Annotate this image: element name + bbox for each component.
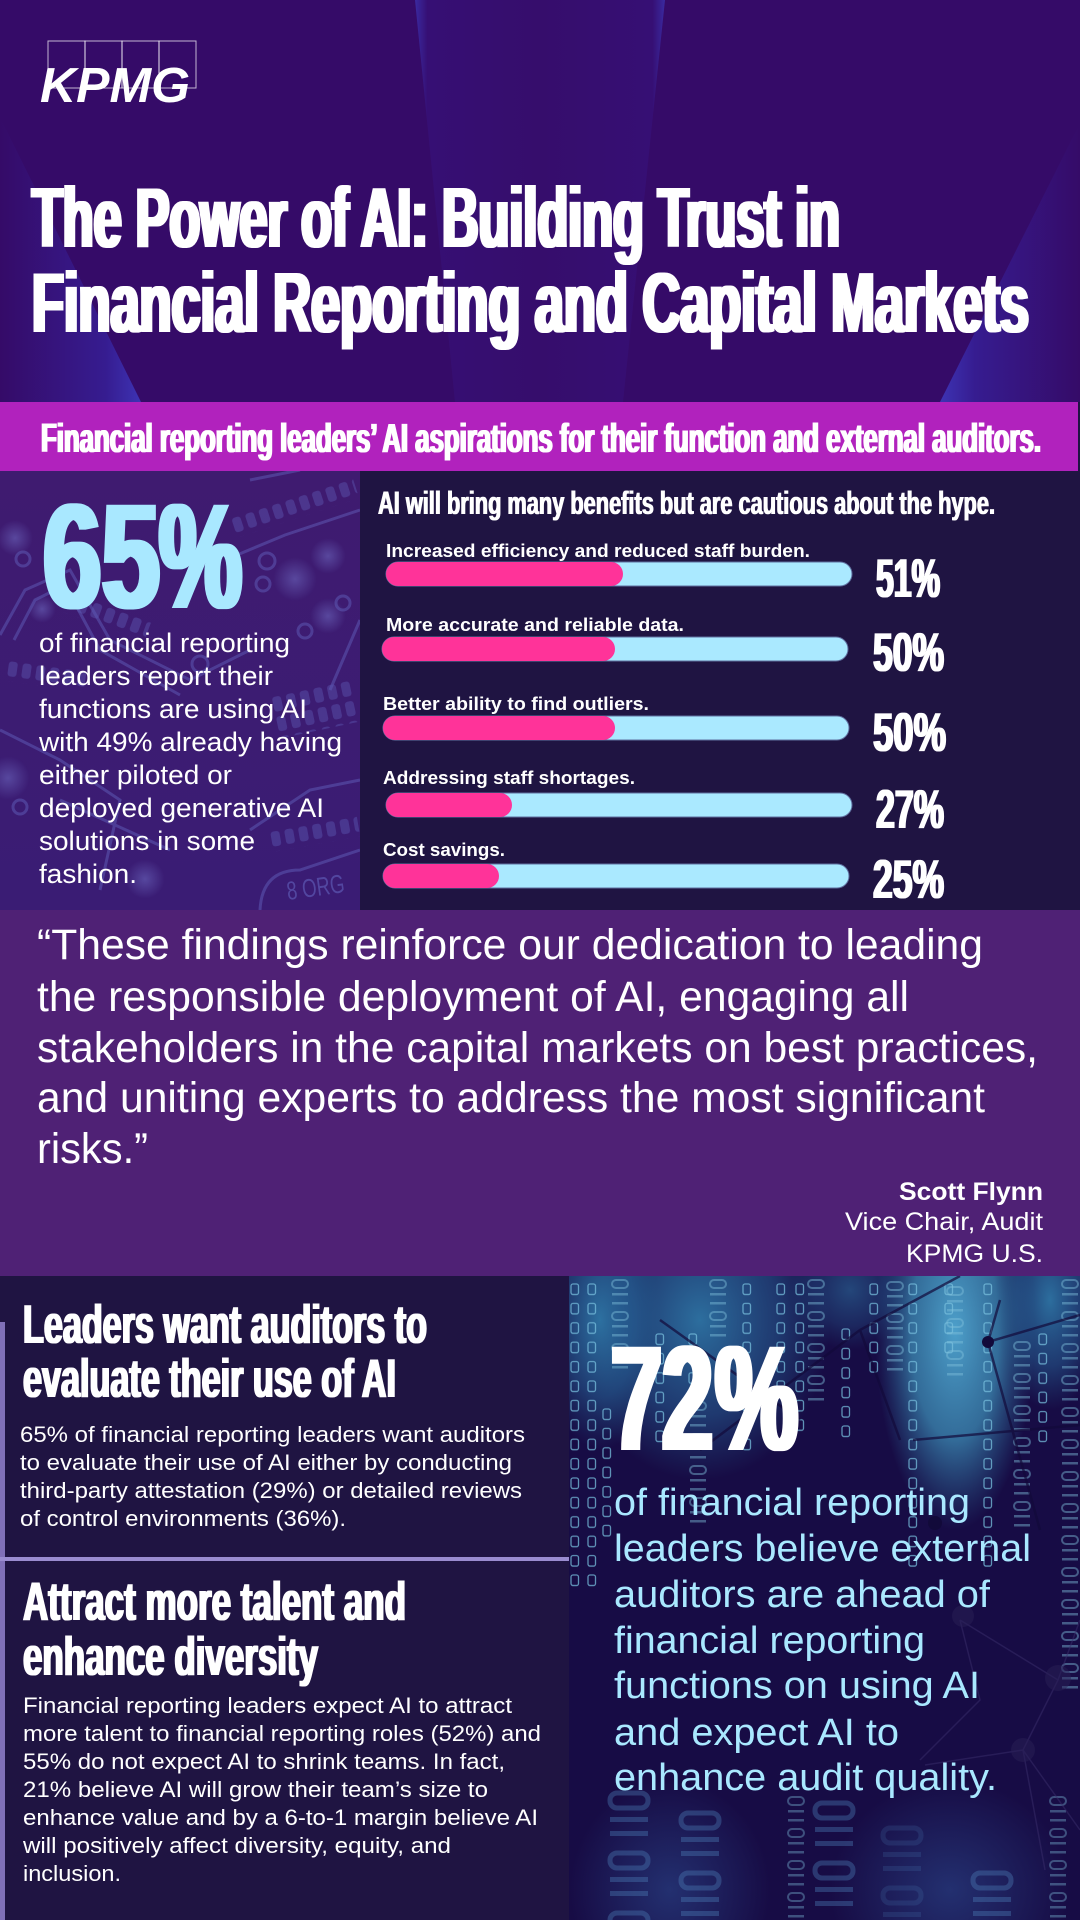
- stat description: [614, 1482, 1031, 1799]
- bar: efficiency 51%: Increased efficiency and reduced staff burden.: [386, 541, 810, 561]
- stat description: with 49% already having: [38, 727, 342, 757]
- big number 72%: 72: [611, 1314, 713, 1482]
- block: auditors: Leaders want auditors to: [23, 1293, 427, 1355]
- header background: [0, 0, 1080, 402]
- quote text: stakeholders in the capital markets on best practices,: [37, 1024, 1038, 1072]
- bar: cost savings 25%: Cost savings.: [383, 840, 505, 860]
- bar: accurate data 50%: More accurate and reliable data.: [386, 615, 684, 635]
- block: talent: will positively affect diversity, equity, and: [22, 1833, 451, 1858]
- stat description: solutions in some: [39, 826, 255, 856]
- bar: outliers 50%: Better ability to find outliers.: [383, 694, 649, 714]
- attribution: Vice Chair, Audit: [845, 1208, 1043, 1236]
- stat description: financial reporting: [614, 1620, 925, 1662]
- attribution: KPMG U.S.: [906, 1240, 1043, 1268]
- panel: 72% stat with binary background: [569, 1276, 1080, 1920]
- big number 72%: %: [715, 1314, 798, 1482]
- attribution: Scott Flynn: [899, 1178, 1043, 1206]
- circuit board texture: [0, 470, 362, 910]
- panel: 65% stat with circuit board background: [0, 470, 362, 910]
- quote text: [37, 921, 1038, 1173]
- title: [32, 171, 1029, 351]
- stat description: deployed generative AI: [39, 793, 324, 823]
- stat description: of financial reporting: [39, 628, 290, 658]
- quote text: “These findings reinforce our dedication to leading: [37, 921, 983, 969]
- stat description: fashion.: [39, 859, 137, 889]
- stat description: leaders report their: [39, 661, 273, 691]
- bar: cost savings 25%: 25%: [873, 848, 944, 910]
- circuit board texture: 8 ORG: [285, 868, 346, 906]
- block: talent: Financial reporting leaders expect AI to attract: [23, 1693, 513, 1718]
- bar: staff shortages 27%: 27%: [876, 778, 944, 840]
- panel: quote: [0, 910, 1080, 1276]
- quote text: risks.”: [37, 1125, 148, 1173]
- bar: efficiency 51%: 51%: [876, 547, 940, 609]
- big number 65%: 65: [43, 472, 160, 640]
- stat description: either piloted or: [39, 760, 232, 790]
- bar: efficiency 51%: [386, 541, 940, 609]
- bar: accurate data 50%: 50%: [873, 621, 944, 683]
- block: talent: enhance value and by a 6-to-1 margin believe AI: [23, 1805, 538, 1830]
- bar: staff shortages 27%: Addressing staff shortages.: [383, 768, 635, 788]
- block: talent: more talent to financial reporting roles (52%) and: [23, 1721, 541, 1746]
- stat description: [38, 628, 342, 889]
- binary texture: [569, 1276, 1080, 1920]
- block: auditors: evaluate their use of AI: [23, 1347, 396, 1409]
- block: auditors: to evaluate their use of AI either by conducting: [20, 1450, 512, 1475]
- block: auditors: of control environments (36%).: [20, 1506, 346, 1531]
- stat description: enhance audit quality.: [614, 1757, 997, 1799]
- block: auditors: 65% of financial reporting leaders want auditors: [20, 1422, 525, 1447]
- KPMG logo: KPMG: [40, 59, 190, 113]
- bar: outliers 50%: 50%: [873, 701, 946, 763]
- block: talent: 55% do not expect AI to shrink teams. In fact,: [23, 1749, 505, 1774]
- big number 65%: %: [159, 472, 242, 640]
- stat description: functions are using AI: [39, 694, 307, 724]
- stat description: of financial reporting: [614, 1482, 970, 1524]
- quote text: and uniting experts to address the most significant: [37, 1074, 985, 1122]
- block: talent: inclusion.: [23, 1861, 121, 1886]
- stat description: and expect AI to: [614, 1712, 899, 1754]
- block: talent: enhance diversity: [23, 1625, 318, 1687]
- panel: benefits bar chart: [360, 471, 1080, 910]
- stat description: leaders believe external: [614, 1528, 1031, 1570]
- block: auditors: third-party attestation (29%) or detailed reviews: [20, 1478, 522, 1503]
- bar: cost savings 25%: [383, 840, 944, 910]
- block: talent: [22, 1570, 541, 1886]
- attribution: [845, 1178, 1043, 1268]
- quote text: the responsible deployment of AI, engaging all: [37, 973, 909, 1021]
- panel: left text column: [0, 1276, 569, 1920]
- subtitle band: [0, 402, 1078, 471]
- bar: outliers 50%: [383, 694, 946, 763]
- block: talent: Attract more talent and: [23, 1570, 406, 1632]
- bar: staff shortages 27%: [383, 768, 944, 840]
- block: talent: 21% believe AI will grow their team’s size to: [23, 1777, 488, 1802]
- bar: accurate data 50%: [382, 615, 944, 683]
- stat description: functions on using AI: [614, 1665, 980, 1707]
- block: auditors: [20, 1293, 525, 1531]
- stat description: auditors are ahead of: [614, 1574, 990, 1616]
